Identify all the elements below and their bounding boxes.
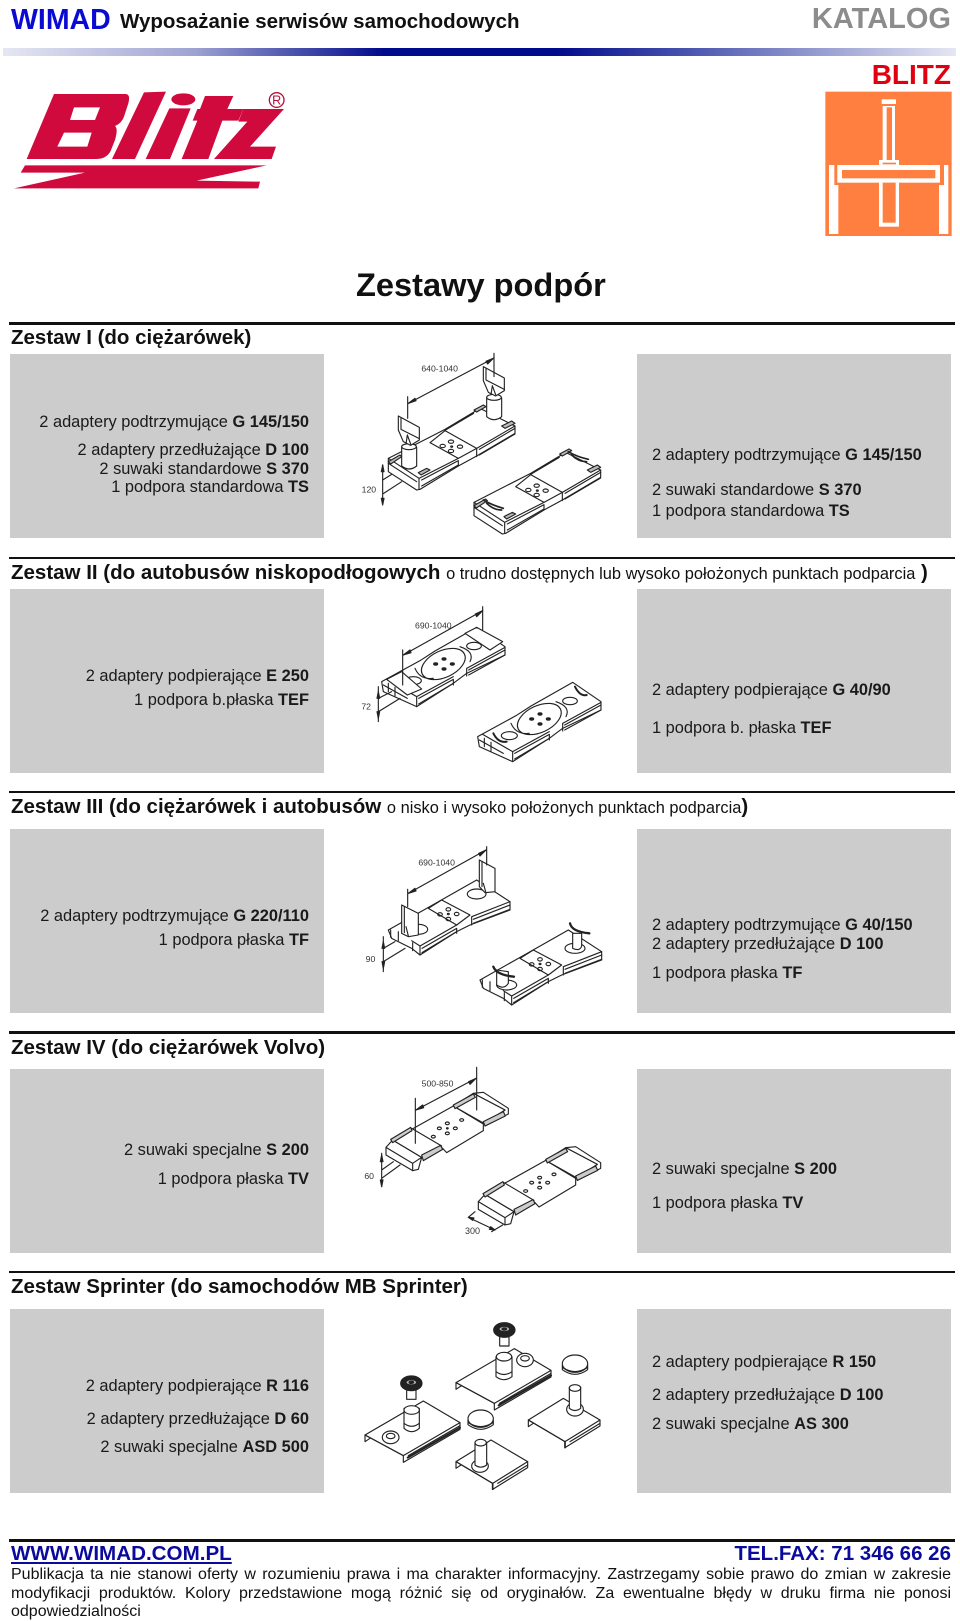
footer: disclaimer line 2: modyfikacji produktów. Kolory przedstawione mogą różnić się od oryginałów. Za ewentualne błędy w druku firma nie ponosi [11,1585,951,1602]
panel: Zestaw I left: 2 adaptery podtrzymujące G 145/150 [39,413,309,431]
drawing: Zestaw IV supports: 500-850 [422,1079,454,1089]
panel: Zestaw III right: 2 adaptery przedłużające D 100 [652,935,883,953]
panel: Zestaw II right [637,589,951,773]
panel: Zestaw Sprinter right: 2 adaptery przedłużające D 100 [652,1386,883,1404]
plate A [365,1401,460,1462]
drawing: Zestaw II supports: 690-1040 [415,620,452,630]
drawing: Zestaw III supports: 690-1040 [418,858,455,868]
second unit yokes [565,943,585,953]
drawing: Zestaw II supports [361,606,602,762]
panel: Zestaw III left: 2 adaptery podtrzymujące G 220/110 [40,907,309,925]
panel: Zestaw Sprinter right: 2 suwaki specjalne AS 300 [652,1415,849,1433]
heading: Zestaw II: Zestaw II (do autobusów niskopodłogowych o trudno dostępnych lub wysoko położonych punktach podparcia ) [11,561,928,584]
header gradient bar [3,48,956,56]
panel: Zestaw I right [637,354,951,538]
panel: Zestaw III right: 1 podpora płaska TF [652,964,802,982]
panel: Zestaw Sprinter right [637,1309,951,1493]
panel: Zestaw II right: 1 podpora b. płaska TEF [652,719,832,737]
footer: disclaimer line 3: odpowiedzialności [11,1603,141,1620]
drawing: Zestaw I supports: 120 [362,485,376,495]
drawing: Sprinter adapters [364,1322,601,1490]
brand label: BLITZ: BLITZ [872,59,951,90]
panel: Zestaw III left: 1 podpora płaska TF [159,931,309,949]
footer: disclaimer line 1: Publikacja ta nie stanowi oferty w rozumieniu prawa i ma charakter informacyjny. Zastrzegamy sobie prawo do zmian w zakresie [11,1566,951,1583]
logo: Blitz [14,92,285,188]
drawing: Zestaw I supports: 640-1040 [421,364,458,374]
panel: Zestaw Sprinter left: 2 adaptery przedłużające D 60 [87,1410,309,1428]
pads [387,627,503,695]
panel: Zestaw I right: 2 suwaki standardowe S 370 [652,481,862,499]
heading: Zestaw III: Zestaw III (do ciężarówek i autobusów o nisko i wysoko położonych punktach podparcia) [11,795,748,818]
hooks [493,687,587,742]
panel: Zestaw Sprinter left: 2 adaptery podpierające R 116 [86,1377,309,1395]
panel: Zestaw III right [637,829,951,1013]
drawing: Zestaw III supports: 90 [366,954,375,964]
hooks [483,452,588,510]
panel: Zestaw I right: 2 adaptery podtrzymujące G 145/150 [652,446,922,464]
panel: Zestaw Sprinter right: 2 adaptery podpierające R 150 [652,1353,876,1371]
footer: phone: TEL.FAX: 71 346 66 26 [734,1542,951,1565]
panel: Zestaw II left: 2 adaptery podpierające E 250 [86,667,309,685]
panel: Zestaw I left: 2 adaptery przedłużające D 100 [78,441,309,459]
panel: Zestaw III right: 2 adaptery podtrzymujące G 40/150 [652,916,913,934]
panel: Zestaw IV left: 1 podpora płaska TV [158,1170,309,1188]
panel: Zestaw Sprinter left: 2 suwaki specjalne ASD 500 [100,1438,309,1456]
drawing: Zestaw I supports [362,352,602,535]
header: subtitle: Wyposażanie serwisów samochodowych [120,10,520,33]
panel: Zestaw I left [10,354,324,538]
plate C [528,1398,600,1448]
panel: Zestaw II left: 1 podpora b.płaska TEF [134,691,309,709]
drawing: Zestaw IV supports: 60 [364,1171,374,1181]
panel: Zestaw IV right [637,1069,951,1253]
drawing: Zestaw III supports [366,846,602,1006]
header: WIMAD brand: WIMAD [11,4,111,36]
drawing: Zestaw II supports: 72 [361,701,371,711]
icon: orange lift diagram [825,92,952,236]
header: KATALOG label: KATALOG [812,3,951,35]
panel: Zestaw IV left [10,1069,324,1253]
panel: Zestaw I right: 1 podpora standardowa TS [652,502,850,520]
panel: Zestaw I left: 2 suwaki standardowe S 370 [99,460,309,478]
panel: Zestaw IV right: 1 podpora płaska TV [652,1194,803,1212]
panel: Zestaw Sprinter left [10,1309,324,1493]
panel: Zestaw II right: 2 adaptery podpierające G 40/90 [652,681,891,699]
footer: website: WWW.WIMAD.COM.PL [11,1542,232,1565]
drawing: Zestaw IV supports [364,1066,602,1232]
plate D [456,1440,528,1489]
forks [409,924,428,934]
plate B [456,1349,551,1410]
dimension label: 300: 300 [465,1226,480,1236]
panel: Zestaw I left: 1 podpora standardowa TS [111,478,309,496]
heading: Zestaw Sprinter: Zestaw Sprinter (do samochodów MB Sprinter) [11,1275,468,1298]
title: Zestawy podpór [356,266,606,303]
panel: Zestaw IV left: 2 suwaki specjalne S 200 [124,1141,309,1159]
heading: Zestaw I: Zestaw I (do ciężarówek) [11,326,251,349]
logo: Blitz: R [272,94,281,108]
panel: Zestaw III left [10,829,324,1013]
panel: Zestaw IV right: 2 suwaki specjalne S 200 [652,1160,837,1178]
heading: Zestaw IV: Zestaw IV (do ciężarówek Volvo) [11,1036,325,1059]
panel: Zestaw II left [10,589,324,773]
